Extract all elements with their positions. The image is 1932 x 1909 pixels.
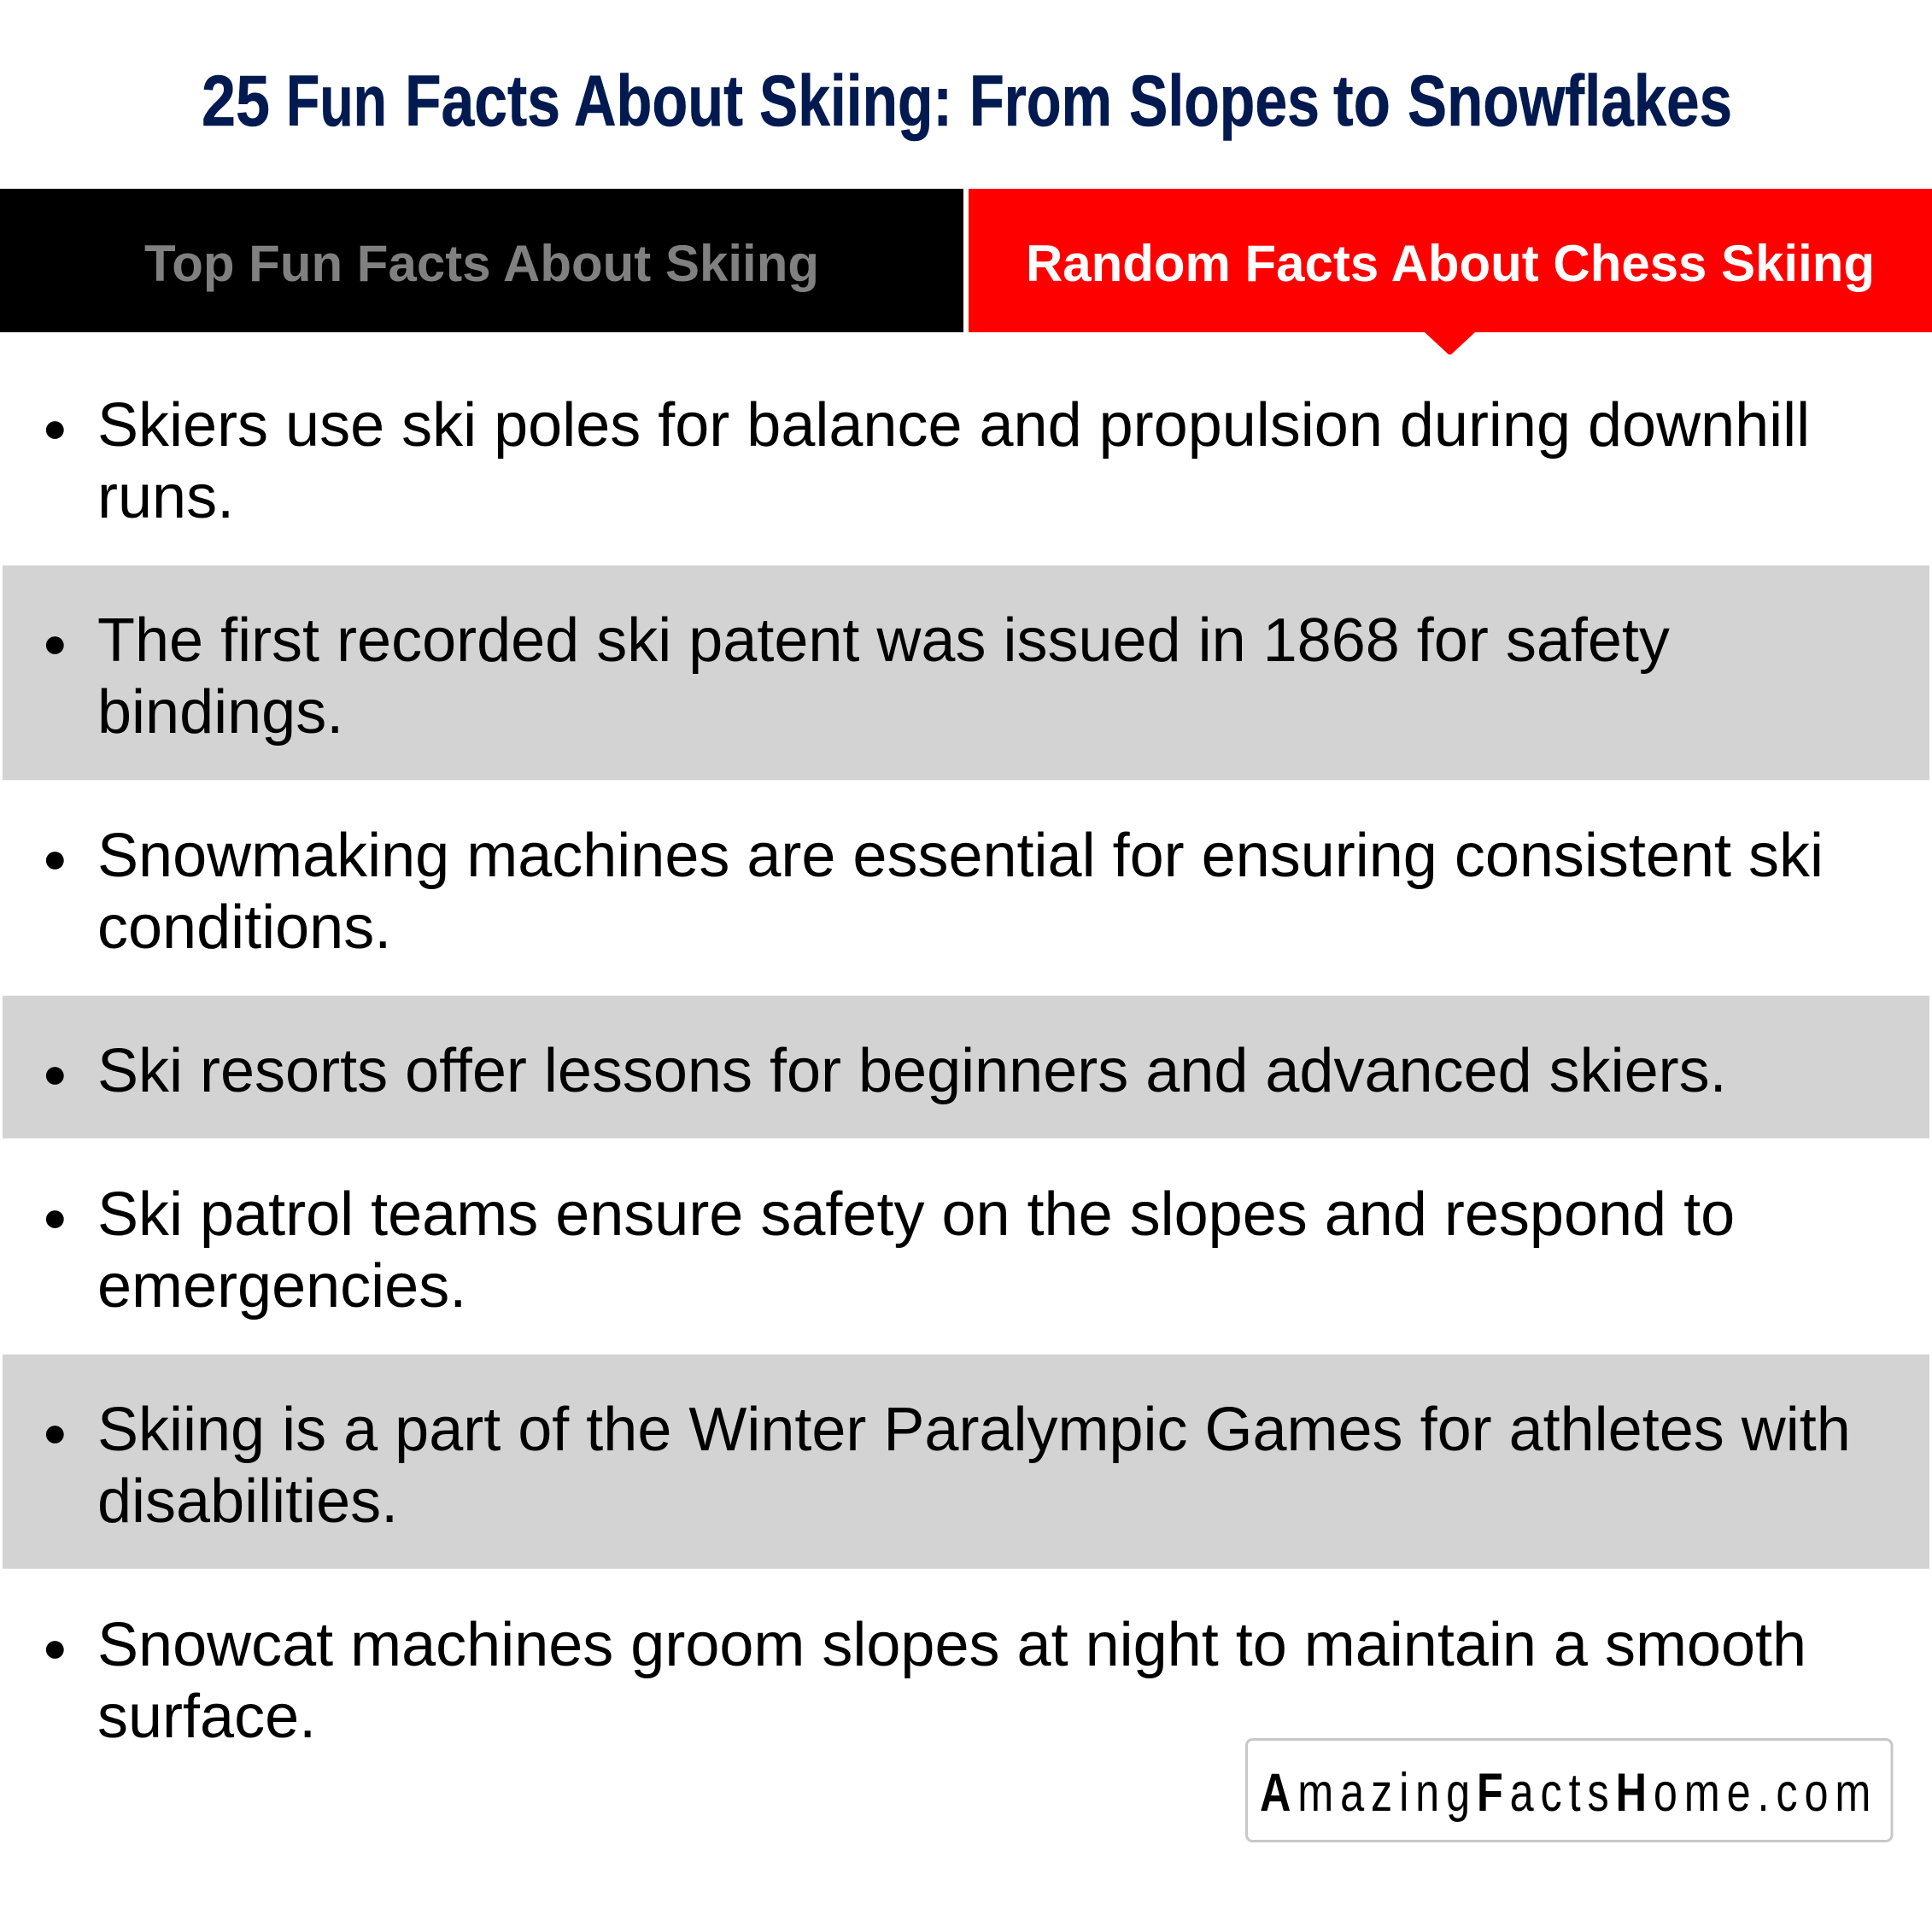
fact 7 [46,1611,1806,1751]
fact 5 [46,1180,1735,1320]
title: Skiing: [759,61,952,141]
fact 7: Snowcat machines groom slopes at night to maintain a smooth [97,1611,1806,1679]
fact 2: The first recorded ski patent was issued in 1868 for safety [97,606,1670,675]
tab: top fun facts [0,189,963,332]
fact 2 [3,565,1929,780]
tab: top fun facts: Top Fun Facts About Skiing [144,235,819,292]
watermark [1247,1739,1892,1842]
title: Fun [286,61,387,141]
tab: random facts (active) [969,189,1932,354]
fact 3 [46,822,1824,962]
fact 6: Skiing is a part of the Winter Paralympic Games for athletes with [97,1396,1851,1464]
fact 1: Skiers use ski poles for balance and propulsion during downhill [97,391,1810,460]
fact 5: emergencies. [97,1252,466,1320]
title: 25 [202,61,270,141]
watermark: AmazingFactsHome.com [1260,1763,1877,1823]
fact 6 [3,1355,1929,1569]
title: Facts [405,61,560,141]
title: From [969,61,1112,141]
title: to [1333,61,1390,141]
title: About [574,61,743,141]
fact 1: runs. [97,463,234,531]
fact 4 [3,996,1929,1139]
title: Snowflakes [1408,61,1732,141]
title: Slopes [1129,61,1320,141]
tab: random facts (active): Random Facts About Chess Skiing [1026,235,1875,292]
fact 5: Ski patrol teams ensure safety on the slopes and respond to [97,1180,1735,1249]
fact 2: bindings. [97,678,343,747]
fact 7: surface. [97,1683,316,1751]
fact 1 [46,391,1810,531]
title [202,61,1732,141]
fact 4: Ski resorts offer lessons for beginners and advanced skiers. [97,1037,1727,1105]
fact 3: Snowmaking machines are essential for ensuring consistent ski [97,822,1824,890]
fact 6: disabilities. [97,1467,398,1536]
fact 3: conditions. [97,893,391,962]
